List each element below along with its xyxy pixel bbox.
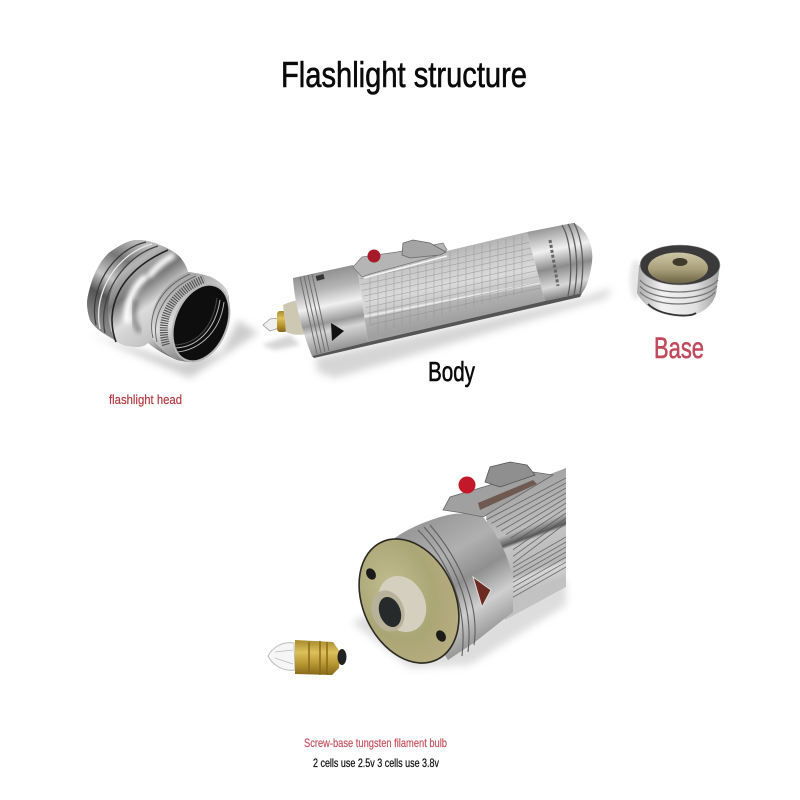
threaded ribs [300,274,329,354]
knurled barrel [358,232,545,342]
head opening [162,276,240,370]
collar ribs [418,525,475,656]
triangle mark [473,577,491,607]
rear band and collar [293,265,368,356]
nozzle [369,568,435,640]
knurl grid [360,235,540,332]
screw holes [364,567,378,581]
lower shadow edge [312,293,582,358]
photo: flashlight body [262,223,612,378]
base ribs [640,280,718,304]
plate dark face [478,480,537,510]
neck flange [150,272,228,362]
switch plate [443,472,553,517]
black contact tip [338,649,346,665]
flange ribs [152,274,196,342]
plate highlight [364,256,447,278]
caption: screw-base bulb: Screw-base tungsten filament bulb [304,736,447,750]
end cap threads [527,223,592,301]
title: Flashlight structure [281,54,527,95]
dark dome reflection [134,300,140,332]
base clip [648,304,696,316]
infographic canvas [87,60,720,768]
glass envelope [268,643,295,670]
photo: screw-base bulb [268,640,346,675]
caption: cell voltages: 2 cells use 2.5v 3 cells use 3.8v [313,756,439,770]
red button [368,250,380,262]
knurled band [164,279,204,345]
threaded rim [87,240,160,340]
inner thread glints [173,298,224,352]
base rim [640,245,720,285]
brass screw base [295,640,340,675]
engraved text band [550,240,558,286]
brass dome [648,252,708,284]
label: body: Body [428,356,475,387]
photo: flashlight close-up [340,462,566,679]
barrel ribbing [480,478,566,599]
switch plate [353,243,447,277]
barrel [483,468,566,620]
base threads [309,641,327,675]
lamp stub on body [263,300,309,335]
triangle mark [331,323,344,341]
photo: flashlight head [87,240,258,378]
filament support [275,650,293,664]
label: flashlight head: flashlight head [109,392,182,407]
photo: flashlight base [630,245,720,317]
small mark [316,274,325,281]
center hole [672,258,688,266]
slider switch [485,462,535,487]
red button [458,476,476,494]
slider switch [402,240,446,258]
seam groove [112,250,168,342]
end face [340,523,478,679]
head highlights [127,256,172,320]
rim ribs [94,242,158,333]
label: base: Base [654,332,704,365]
collar [378,513,513,660]
